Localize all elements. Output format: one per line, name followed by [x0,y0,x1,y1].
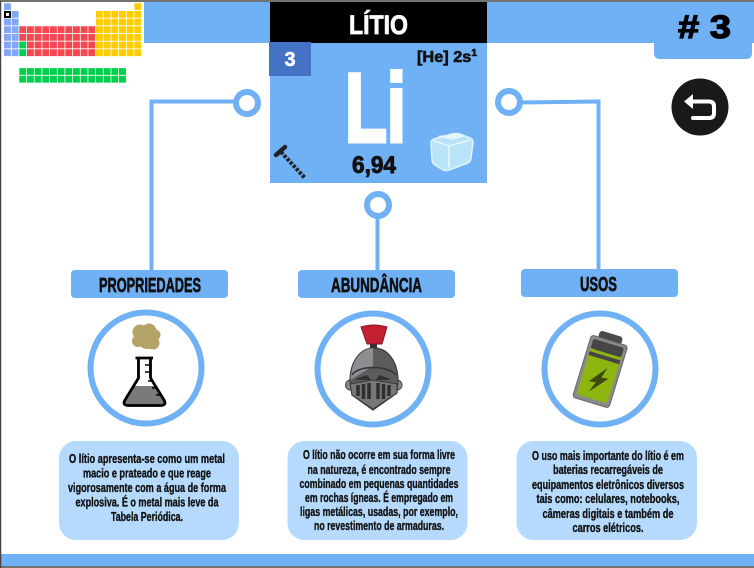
text box: usos: câmeras digitais e também de [542,507,674,521]
heading: propriedades: PROPRIEDADES [99,275,201,297]
text box: propriedades: Tabela Periódica. [111,510,183,524]
heading: propriedades [71,270,228,298]
heading: abundancia: ABUNDÂNCIA [331,273,422,297]
connector: propriedades [152,92,258,270]
text box: usos: baterias recarregáveis de [553,463,663,477]
atomic number [269,42,311,76]
text box: usos: tais como: celulares, notebooks, [536,492,680,506]
flask [124,358,165,406]
connector: abundancia [367,194,389,270]
back button [672,78,728,136]
text box: propriedades [59,441,239,540]
text box: abundancia [288,441,468,540]
number tab [654,9,752,59]
heading: usos [521,269,678,297]
header band [144,2,754,43]
text box: propriedades: explosiva. É o metal mais leve da [76,494,219,510]
knight helmet [346,344,402,410]
heading: usos: USOS [580,274,617,296]
text box: abundancia: O lítio não ocorre em sua forma livre [303,448,455,462]
icon: screw [276,147,305,178]
icon: ice cube [431,134,473,170]
element symbol: Li [345,54,406,162]
text box: usos: carros elétricos. [572,521,644,535]
text box: propriedades: vigorosamente com a água de forma [68,481,227,495]
text box: propriedades: macio e prateado e que reage [83,466,211,480]
title bar [270,2,487,43]
electron configuration: 1 [471,48,477,59]
periodic table mini map [4,7,142,79]
icon circle: battery [544,314,656,424]
smoke cloud [132,324,160,350]
atomic mass: 6,94 [352,152,397,179]
icon circle: helmet [318,314,428,424]
heading: abundancia [298,270,455,298]
plume [361,325,387,344]
text box: abundancia: ligas metálicas, usadas, por exemplo, [300,505,458,519]
footer band [0,554,754,566]
connector: usos [498,91,598,270]
text box: usos [516,441,697,540]
title bar: LÍTIO [349,9,408,40]
number tab: # 3 [678,9,731,45]
text box: abundancia: na natureza, é encontrado sempre [308,463,451,477]
electron configuration: [He] 2s [417,49,470,66]
text box: abundancia: em rochas ígneas. É empregado em [305,490,453,505]
battery [572,328,630,408]
text box: propriedades: O lítio apresenta-se como um metal [69,452,225,466]
icon circle: flask [90,312,202,424]
text box: usos: equipamentos eletrônicos diversos [532,478,684,492]
element card [269,42,487,183]
text box: abundancia: combinado em pequenas quantidades [300,477,459,491]
atomic number: 3 [284,49,296,71]
text box: usos: O uso mais importante do lítio é em [532,449,684,463]
text box: abundancia: no revestimento de armaduras. [314,519,444,533]
